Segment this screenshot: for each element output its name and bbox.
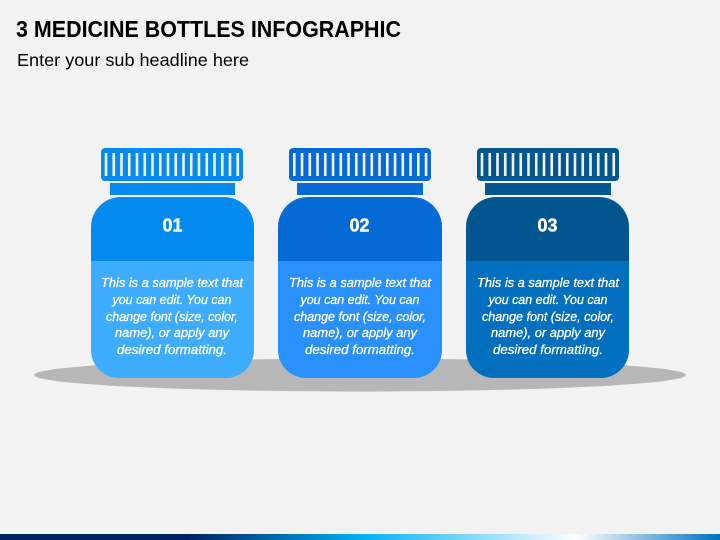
bottle 1 lower body bbox=[91, 261, 254, 378]
bottle 2 text: desired formatting. bbox=[305, 343, 415, 357]
bottle 1 neck bbox=[110, 183, 235, 195]
bottle 3 text: name), or apply any bbox=[491, 326, 606, 340]
bottle 3 number: 03 bbox=[538, 216, 558, 236]
bottle 2 cap bbox=[289, 148, 431, 181]
bottle 1 text: desired formatting. bbox=[117, 343, 227, 357]
bottle 1 cap bbox=[101, 148, 243, 181]
bottle 1 text: change font (size, color, bbox=[106, 310, 238, 324]
bottle 1 text: name), or apply any bbox=[115, 326, 230, 340]
bottle 3 upper body bbox=[466, 197, 629, 261]
bottle 3 cap bbox=[477, 148, 619, 181]
sub headline: Enter your sub headline here bbox=[17, 50, 249, 70]
bottle 2 number: 02 bbox=[350, 216, 370, 236]
bottle 3 bbox=[466, 148, 629, 378]
bottle 3 text: This is a sample text that bbox=[477, 276, 620, 290]
bottle 3 text: change font (size, color, bbox=[482, 310, 614, 324]
bottle 2 neck bbox=[297, 183, 423, 195]
bottle 1 number: 01 bbox=[162, 216, 182, 236]
ground shadow ellipse bbox=[34, 358, 686, 392]
bottle 1 bbox=[91, 148, 254, 378]
bottle 2 text bbox=[289, 276, 432, 357]
bottle 1 text: you can edit. You can bbox=[112, 293, 232, 307]
bottle 2 text: you can edit. You can bbox=[300, 293, 420, 307]
bottle 2 text: This is a sample text that bbox=[289, 276, 432, 290]
bottle 2 text: name), or apply any bbox=[303, 326, 418, 340]
bottle 3 text bbox=[477, 276, 620, 357]
bottle 3 text: desired formatting. bbox=[493, 343, 603, 357]
bottle 2 lower body bbox=[278, 261, 442, 378]
bottle 1 upper body bbox=[91, 197, 254, 261]
bottle 2 bbox=[278, 148, 442, 378]
bottle 3 text: you can edit. You can bbox=[488, 293, 608, 307]
bottle 2 text: change font (size, color, bbox=[294, 310, 426, 324]
bottom gradient bar bbox=[0, 534, 720, 540]
bottle 1 text: This is a sample text that bbox=[101, 276, 244, 290]
bottle 3 lower body bbox=[466, 261, 629, 378]
title: 3 MEDICINE BOTTLES INFOGRAPHIC bbox=[16, 16, 401, 42]
bottle 2 upper body bbox=[278, 197, 442, 261]
bottle 1 text bbox=[101, 276, 244, 357]
bottle 3 neck bbox=[485, 183, 611, 195]
